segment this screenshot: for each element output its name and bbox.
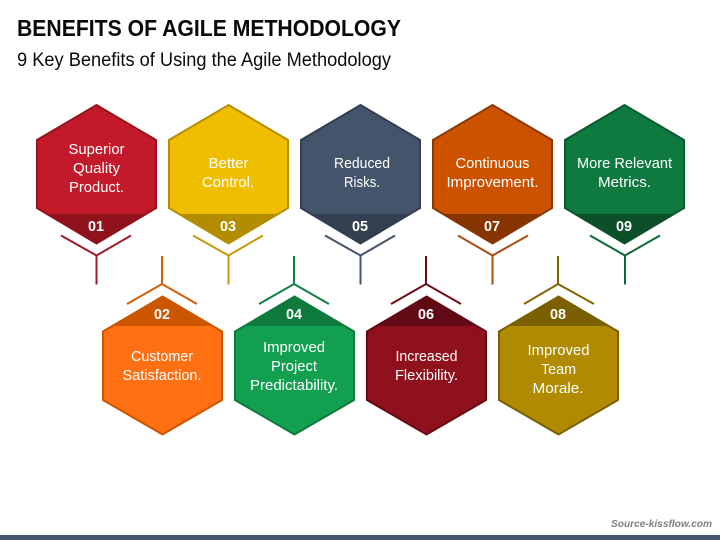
benefit 01: Product. [69,179,124,196]
footer bar [0,535,720,540]
benefit 07: 07 [484,218,500,235]
benefit 03: Better [208,155,248,172]
benefit 02: 02 [154,306,170,323]
benefit 02 [103,256,222,434]
source note: Source-kissflow.com [611,518,712,530]
benefit 08: Improved [528,342,590,359]
benefit 01: Quality [73,160,121,177]
benefit 07: Continuous [456,155,530,172]
benefit 05 [301,105,420,284]
benefit 04 [235,256,354,434]
benefit 01: 01 [88,218,104,235]
benefit 05: Reduced [334,155,390,172]
benefit 05: 05 [352,218,368,235]
benefit 04: 04 [286,306,303,323]
benefit 05: Risks. [344,174,380,191]
benefit 09 [565,105,684,284]
benefit 06: 06 [418,306,434,323]
benefit 02: Customer [131,348,193,365]
benefit 01: Superior [68,141,124,158]
benefit 03 [169,105,288,284]
benefit 08: Team [541,361,576,378]
benefit 06: Increased [396,348,458,365]
benefit 09: Metrics. [598,174,651,191]
benefit 01 [37,105,156,284]
benefit 04: Project [271,358,318,375]
benefit 03: 03 [220,218,236,235]
benefit 09: More Relevant [577,155,673,172]
benefit 06: Flexibility. [395,367,458,384]
benefit 08: 08 [550,306,566,323]
benefit 03: Control. [202,174,254,191]
title: BENEFITS OF AGILE METHODOLOGY [17,15,401,41]
benefit 02: Satisfaction. [122,367,202,384]
benefit 04: Predictability. [250,377,338,394]
benefit 07: Improvement. [446,174,538,191]
benefit 07 [433,105,552,284]
benefit 04: Improved [263,339,325,356]
benefit 08: Morale. [532,380,584,397]
benefit 06 [367,256,486,434]
benefit 08 [499,256,618,434]
subtitle: 9 Key Benefits of Using the Agile Methodology [17,50,391,71]
benefit 09: 09 [616,218,632,235]
